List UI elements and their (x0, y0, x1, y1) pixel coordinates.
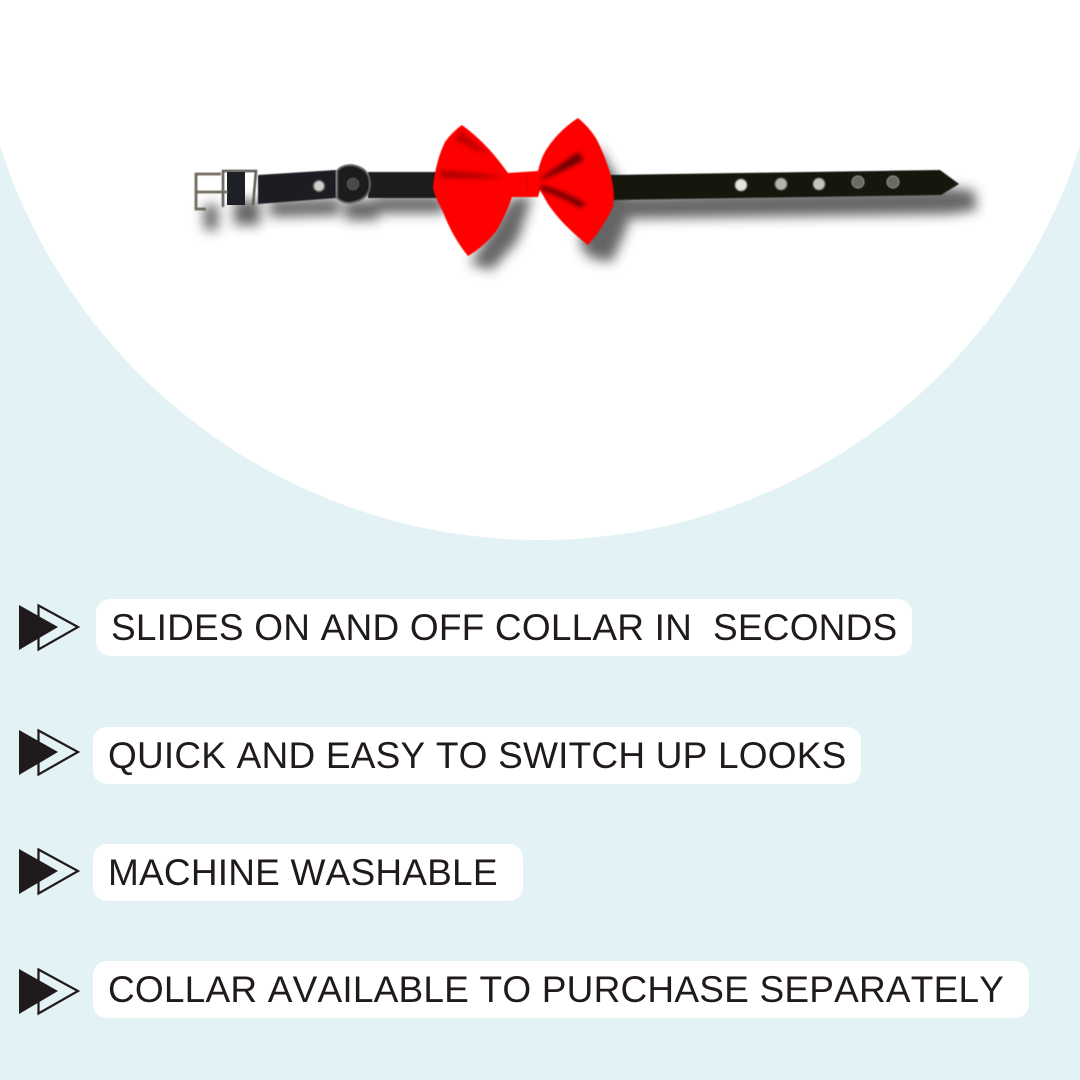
bow tie folds (440, 130, 586, 208)
text pill: QUICK AND EASY TO SWITCH UP LOOKS (108, 735, 846, 776)
buckle (196, 174, 228, 209)
text pill: MACHINE WASHABLE (108, 852, 498, 893)
feature row 4 (19, 961, 1029, 1018)
icon: double arrow (19, 968, 80, 1016)
rivets on right strap (735, 176, 899, 191)
text pill: COLLAR AVAILABLE TO PURCHASE SEPARATELY (108, 969, 1004, 1010)
feature row 2 (19, 727, 861, 784)
rivet on left strap (314, 180, 324, 192)
collar strap left (258, 170, 336, 204)
collar and bow tie (196, 118, 977, 270)
white semicircle (0, 0, 1080, 540)
strap keeper (223, 171, 256, 207)
text pill (93, 961, 1029, 1018)
collar strap right with tip (610, 170, 959, 200)
bow knot seam (526, 173, 528, 190)
icon: double arrow (19, 604, 80, 652)
text pill (93, 844, 523, 901)
hero illustration: white circle with collar and bow tie (0, 0, 1080, 540)
bow tie (433, 118, 614, 256)
text pill (93, 727, 861, 784)
D ring (337, 165, 370, 203)
text pill (96, 599, 912, 656)
icon: double arrow (19, 728, 80, 776)
icon: double arrow (19, 848, 80, 896)
feature row 3 (19, 844, 523, 901)
drop shadows (204, 145, 977, 270)
collar strap middle (368, 172, 438, 198)
text pill: SLIDES ON AND OFF COLLAR IN SECONDS (111, 607, 897, 648)
feature row 1 (19, 599, 912, 656)
